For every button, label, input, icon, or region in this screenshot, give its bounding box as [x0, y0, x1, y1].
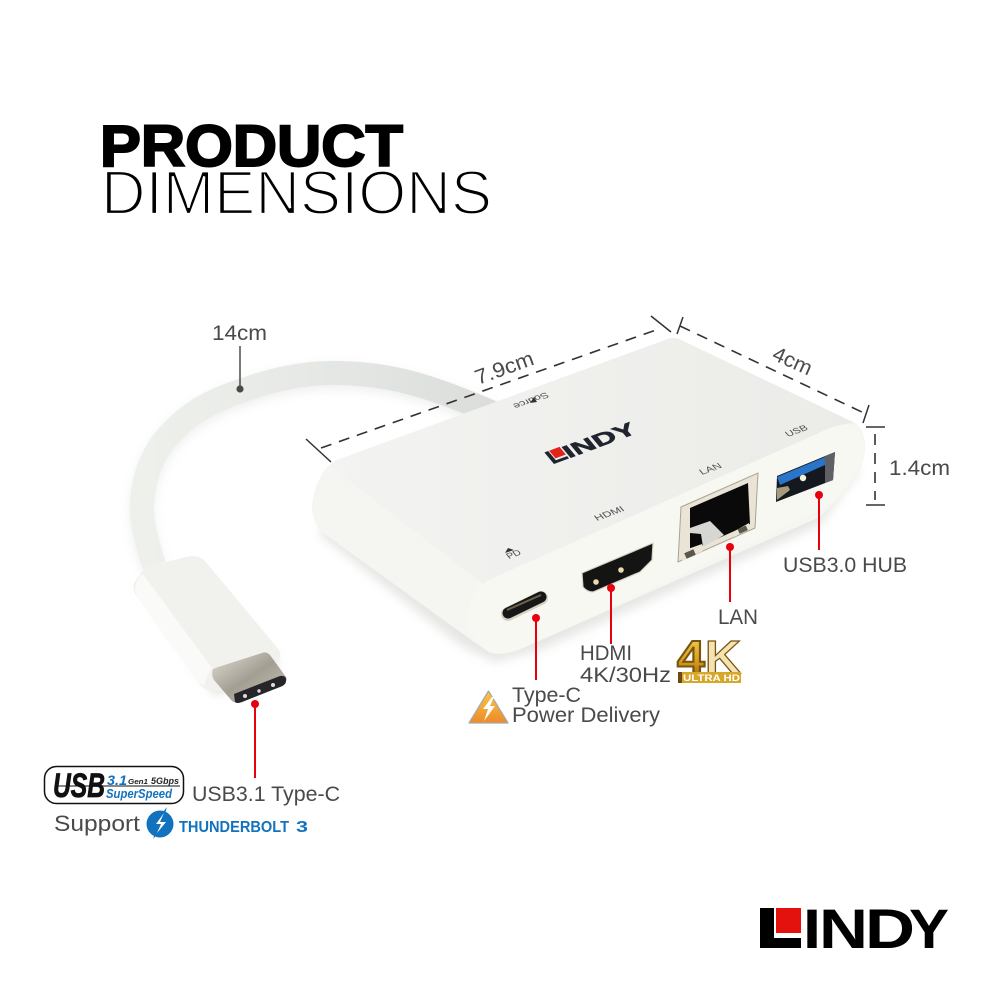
- title: [100, 114, 492, 228]
- Support Thunderbolt 3: THUNDERBOLT: [179, 819, 289, 836]
- callout: HDMI 4K/30Hz: [580, 584, 671, 687]
- port labels: PD: [504, 548, 524, 561]
- body printed logo: [543, 419, 643, 468]
- callout: HDMI 4K/30Hz: HDMI: [580, 642, 632, 665]
- badge: USB 3.1 SuperSpeed: 3.1: [107, 772, 127, 788]
- callout: Type-C Power Delivery: Type-C: [512, 684, 581, 707]
- LINDY logo: I: [803, 897, 821, 960]
- LAN port: [678, 473, 758, 562]
- dimension: cable length 14cm: 14cm: [212, 322, 267, 345]
- callout: Type-C Power Delivery: Power Delivery: [512, 704, 661, 727]
- LINDY logo: [760, 897, 949, 960]
- badge: USB 3.1 SuperSpeed: 5Gbps: [151, 776, 179, 786]
- port labels: Source: [511, 390, 551, 411]
- port labels: [504, 390, 810, 561]
- callout: USB3.0 HUB: [783, 491, 907, 577]
- callout: LAN: LAN: [718, 606, 758, 629]
- port labels: USB: [783, 423, 810, 439]
- port labels: HDMI: [592, 504, 626, 523]
- icon: 4K Ultra HD: ULTRA HD: [683, 673, 740, 684]
- HDMI port: [582, 543, 653, 592]
- LINDY logo: Y: [909, 897, 949, 960]
- body printed logo: INDY: [558, 419, 643, 462]
- Support Thunderbolt 3: Support: [54, 811, 140, 836]
- callout: USB3.1 Type-C connector: USB3.1 Type-C: [192, 783, 340, 806]
- LINDY logo: N: [819, 897, 868, 960]
- Support Thunderbolt 3: [54, 807, 308, 839]
- dimension: width 4cm: [677, 317, 869, 423]
- cable: [142, 373, 500, 569]
- callout: HDMI 4K/30Hz: 4K/30Hz: [580, 664, 671, 687]
- USB-C connector: [133, 556, 287, 703]
- callout: USB3.1 Type-C connector: [192, 700, 340, 806]
- badge: USB 3.1 SuperSpeed: SuperSpeed: [106, 787, 172, 801]
- title: DIMENSIONS: [101, 159, 492, 228]
- title: PRODUCT: [100, 114, 403, 179]
- callout: LAN: [718, 543, 758, 629]
- Support Thunderbolt 3: 3: [296, 819, 308, 836]
- icon: thunderbolt: [146, 807, 174, 839]
- LINDY logo: D: [865, 897, 915, 960]
- badge: USB 3.1 SuperSpeed: USB: [53, 767, 105, 805]
- USB-C port: [507, 595, 541, 614]
- callout: Type-C Power Delivery: [512, 614, 661, 727]
- dimension: height 1.4cm: 1.4cm: [889, 457, 950, 480]
- dimension: length 7.9cm: 7.9cm: [472, 347, 537, 390]
- adapter body: [312, 338, 865, 662]
- dimension: width 4cm: 4cm: [769, 343, 816, 380]
- callout: USB3.0 HUB: USB3.0 HUB: [783, 554, 907, 577]
- badge: USB 3.1 SuperSpeed: [44, 766, 184, 805]
- USB port: [776, 452, 835, 502]
- port labels: LAN: [697, 461, 724, 477]
- badge: USB 3.1 SuperSpeed: Gen1: [128, 777, 148, 786]
- dimension: length 7.9cm: [306, 316, 671, 462]
- dimension: height 1.4cm: [866, 427, 950, 505]
- dimension: cable length 14cm: [212, 322, 267, 393]
- icon: 4K Ultra HD: 4K: [677, 631, 741, 683]
- icon: warning power triangle: [469, 691, 508, 723]
